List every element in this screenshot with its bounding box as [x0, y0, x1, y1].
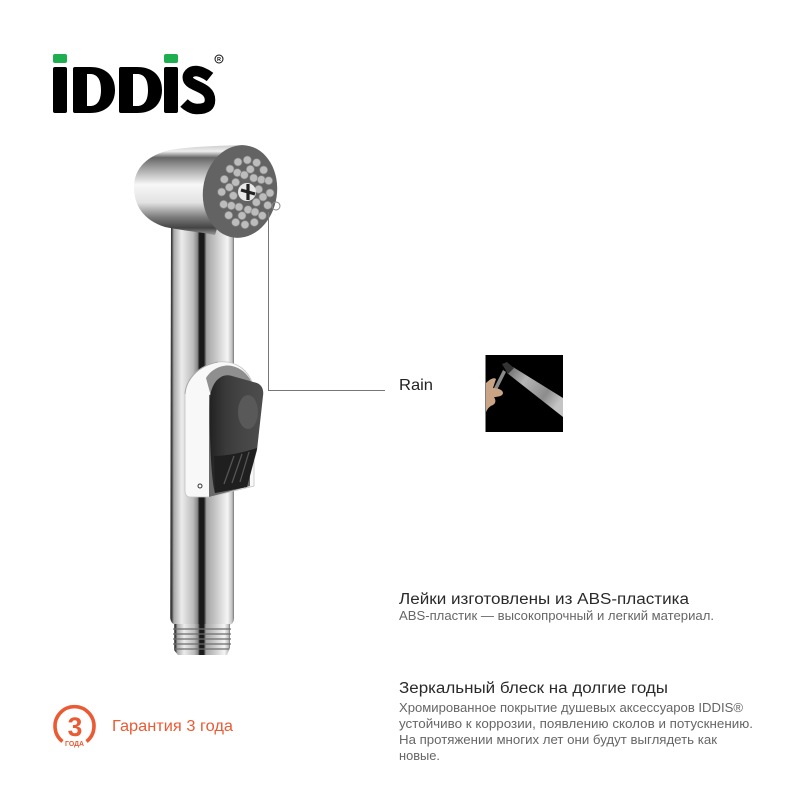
- text block: mirror shine: Зеркальный блеск на долгие годы: [399, 680, 668, 697]
- product: bidet shower head: [134, 140, 283, 655]
- lever housing: [185, 362, 254, 497]
- housing screw: [198, 484, 202, 488]
- callout leader line: [268, 202, 385, 390]
- center screw: [238, 183, 256, 201]
- text block: mirror shine: устойчиво к коррозии, появлению сколов и потускнению.: [399, 716, 753, 731]
- icon: 3-year badge: 3: [68, 712, 82, 742]
- logo: IDDIS: R: [217, 57, 221, 63]
- text block: mirror shine: На протяжении многих лет они будут выглядеть как: [399, 732, 717, 747]
- icon: 3-year badge: ГОДА: [65, 741, 84, 748]
- label: Rain: Rain: [399, 377, 433, 394]
- photo: rain spray mode: [486, 355, 563, 432]
- warranty text: Гарантия 3 года: [112, 718, 233, 735]
- text block: ABS plastic: Лейки изготовлены из ABS-пластика: [399, 591, 689, 608]
- logo: IDDIS: [53, 54, 223, 113]
- head body: [134, 145, 243, 235]
- text block: ABS plastic: [399, 591, 714, 623]
- text block: mirror shine: Хромированное покрытие душевых аксессуаров IDDIS®: [399, 700, 743, 715]
- threaded connector: [173, 624, 231, 655]
- nozzle face: [197, 140, 283, 243]
- rubber lever: [210, 375, 263, 493]
- text block: mirror shine: [399, 680, 753, 763]
- text block: ABS plastic: ABS-пластик — высокопрочный и легкий материал.: [399, 608, 714, 623]
- icon: 3-year badge: [55, 707, 94, 748]
- warranty badge: [55, 707, 233, 748]
- pipe: [170, 225, 234, 625]
- text block: mirror shine: новые.: [399, 748, 440, 763]
